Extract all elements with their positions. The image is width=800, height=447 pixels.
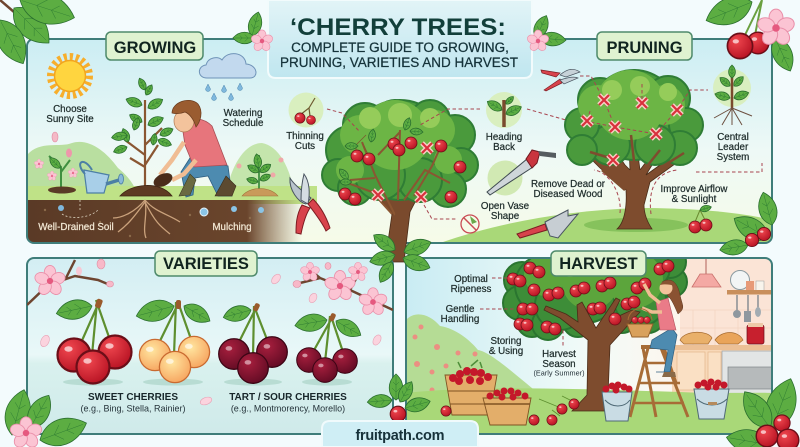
cherries and blossom top right	[701, 0, 799, 75]
label: well-drained soil	[38, 200, 114, 233]
subtitle: PRUNING, VARIETIES AND HARVEST	[280, 55, 518, 70]
tree	[503, 243, 687, 411]
label: choose sunny site: Choose	[53, 104, 87, 115]
label: harvest season: (Early Summer)	[533, 368, 585, 378]
badge: growing: GROWING	[114, 39, 196, 57]
icon: central leader	[713, 65, 752, 125]
label: heading back: Heading	[486, 132, 522, 143]
illustration: cherry tree being thinned	[322, 100, 480, 262]
icon: seedling with blossoms	[34, 132, 78, 194]
icon: pruning saw	[487, 150, 556, 196]
scene: growing garden	[27, 142, 317, 243]
badge: pruning	[597, 32, 692, 60]
dark tart cherries	[219, 303, 287, 383]
flower and leaves top centre left	[233, 10, 274, 52]
label: optimal ripeness: Optimal	[454, 274, 488, 285]
panel: growing and pruning	[27, 39, 772, 262]
icon: thinning cuts	[288, 92, 324, 128]
label: improve airflow and sunlight: & Sunlight	[672, 194, 717, 205]
panel: harvest	[406, 243, 772, 434]
icon: prohibition	[461, 215, 479, 233]
icon: rain cloud	[199, 54, 256, 100]
label: watering schedule: Watering	[224, 108, 262, 119]
icon: top shears	[541, 69, 580, 91]
label: optimal ripeness	[451, 274, 508, 295]
icon: cherry pair on hill	[689, 204, 712, 233]
panel: varieties	[27, 258, 393, 434]
fallen cherries	[441, 396, 579, 425]
basket two	[483, 388, 531, 425]
icon: heading back	[485, 92, 523, 128]
kitchen	[672, 258, 772, 398]
flower and leaves top centre right	[526, 13, 566, 52]
label: mulching	[200, 206, 264, 233]
icon: pruning knife tool	[517, 210, 578, 238]
badge: harvest	[551, 251, 646, 276]
label: heading back: Back	[493, 142, 515, 153]
bucket one	[602, 382, 632, 421]
sweet red cherries	[54, 297, 132, 384]
label: open vase shape: Shape	[491, 211, 520, 222]
icon: plant with mulch	[236, 153, 284, 196]
label: central leader system: Leader	[718, 142, 749, 153]
bush background	[406, 314, 538, 393]
blossom branch left	[27, 259, 114, 305]
badge: harvest: HARVEST	[559, 255, 638, 273]
label: open vase shape: Open Vase	[481, 201, 530, 212]
label: mulching: Mulching	[212, 222, 252, 233]
label: gentle handling: Gentle	[446, 304, 475, 315]
label: remove dead or diseased wood: Diseased Wood	[534, 189, 602, 200]
label: choose sunny site: Sunny Site	[46, 114, 94, 125]
label: gentle handling	[441, 304, 514, 325]
label: harvest season: Harvest	[542, 349, 576, 360]
label: tart sour cherries: (e.g., Montmorency, Morello)	[231, 404, 345, 414]
label: sweet cherries: (e.g., Bing, Stella, Rainier)	[80, 404, 186, 414]
illustration: gardener kneeling	[151, 100, 236, 197]
leaves centre below tree	[368, 230, 433, 285]
basket held	[627, 309, 653, 337]
ladder	[630, 347, 688, 417]
golden rainier cherries	[134, 296, 214, 383]
shadows	[63, 378, 352, 386]
cherry and leaves bottom centre	[367, 374, 432, 422]
badge: varieties: VARIETIES	[163, 255, 249, 273]
label: watering schedule: Schedule	[223, 118, 264, 129]
website box: fruitpath.com	[356, 428, 444, 444]
badge: growing	[106, 32, 203, 60]
leaves and cherries bottom right of pruning	[719, 190, 780, 257]
illustration: pruned cherry tree	[527, 70, 762, 229]
label: storing and using: & Using	[489, 346, 523, 357]
leaves and cherries bottom right	[724, 374, 800, 447]
dark morello cherries	[294, 312, 364, 382]
icon: watering can	[80, 162, 124, 193]
label: gentle handling: Handling	[441, 314, 479, 325]
basket one	[445, 360, 497, 415]
label: harvest season	[533, 330, 585, 378]
bucket two	[694, 378, 729, 419]
illustration: young tree with roots	[111, 77, 180, 238]
title: ‘CHERRY TREES:	[290, 14, 506, 41]
scene: pruning hill	[440, 208, 772, 243]
icon: sun	[50, 56, 90, 96]
blossom branch right	[293, 262, 393, 317]
label: storing and using: Storing	[490, 336, 522, 347]
label: central leader system: Central	[717, 132, 749, 143]
grass	[406, 388, 772, 434]
label: thinning cuts: Thinning	[286, 131, 324, 142]
label: remove dead or diseased wood: Remove Dead or	[531, 179, 606, 190]
website box	[322, 421, 478, 447]
label: sweet cherries: SWEET CHERRIES	[88, 392, 178, 403]
badge: varieties	[155, 251, 257, 276]
leaves and blossom bottom left	[0, 387, 91, 447]
label: central leader system: System	[717, 152, 749, 163]
badge: pruning: PRUNING	[606, 39, 683, 57]
subtitle: COMPLETE GUIDE TO GROWING,	[291, 40, 509, 55]
label: tart sour cherries: TART / SOUR CHERRIES	[229, 392, 347, 403]
label: improve airflow and sunlight: Improve Airflow	[661, 184, 728, 195]
label: thinning cuts: Cuts	[295, 141, 315, 152]
tree cherries	[507, 260, 674, 335]
label: optimal ripeness: Ripeness	[451, 284, 492, 295]
leaves top left	[0, 0, 79, 70]
petals	[39, 273, 383, 406]
label: well-drained soil: Well-Drained Soil	[38, 222, 114, 233]
icon: red pruning shears	[290, 174, 330, 234]
label: harvest season: Season	[542, 359, 576, 370]
title box	[268, 0, 532, 78]
woman on ladder	[642, 280, 683, 377]
